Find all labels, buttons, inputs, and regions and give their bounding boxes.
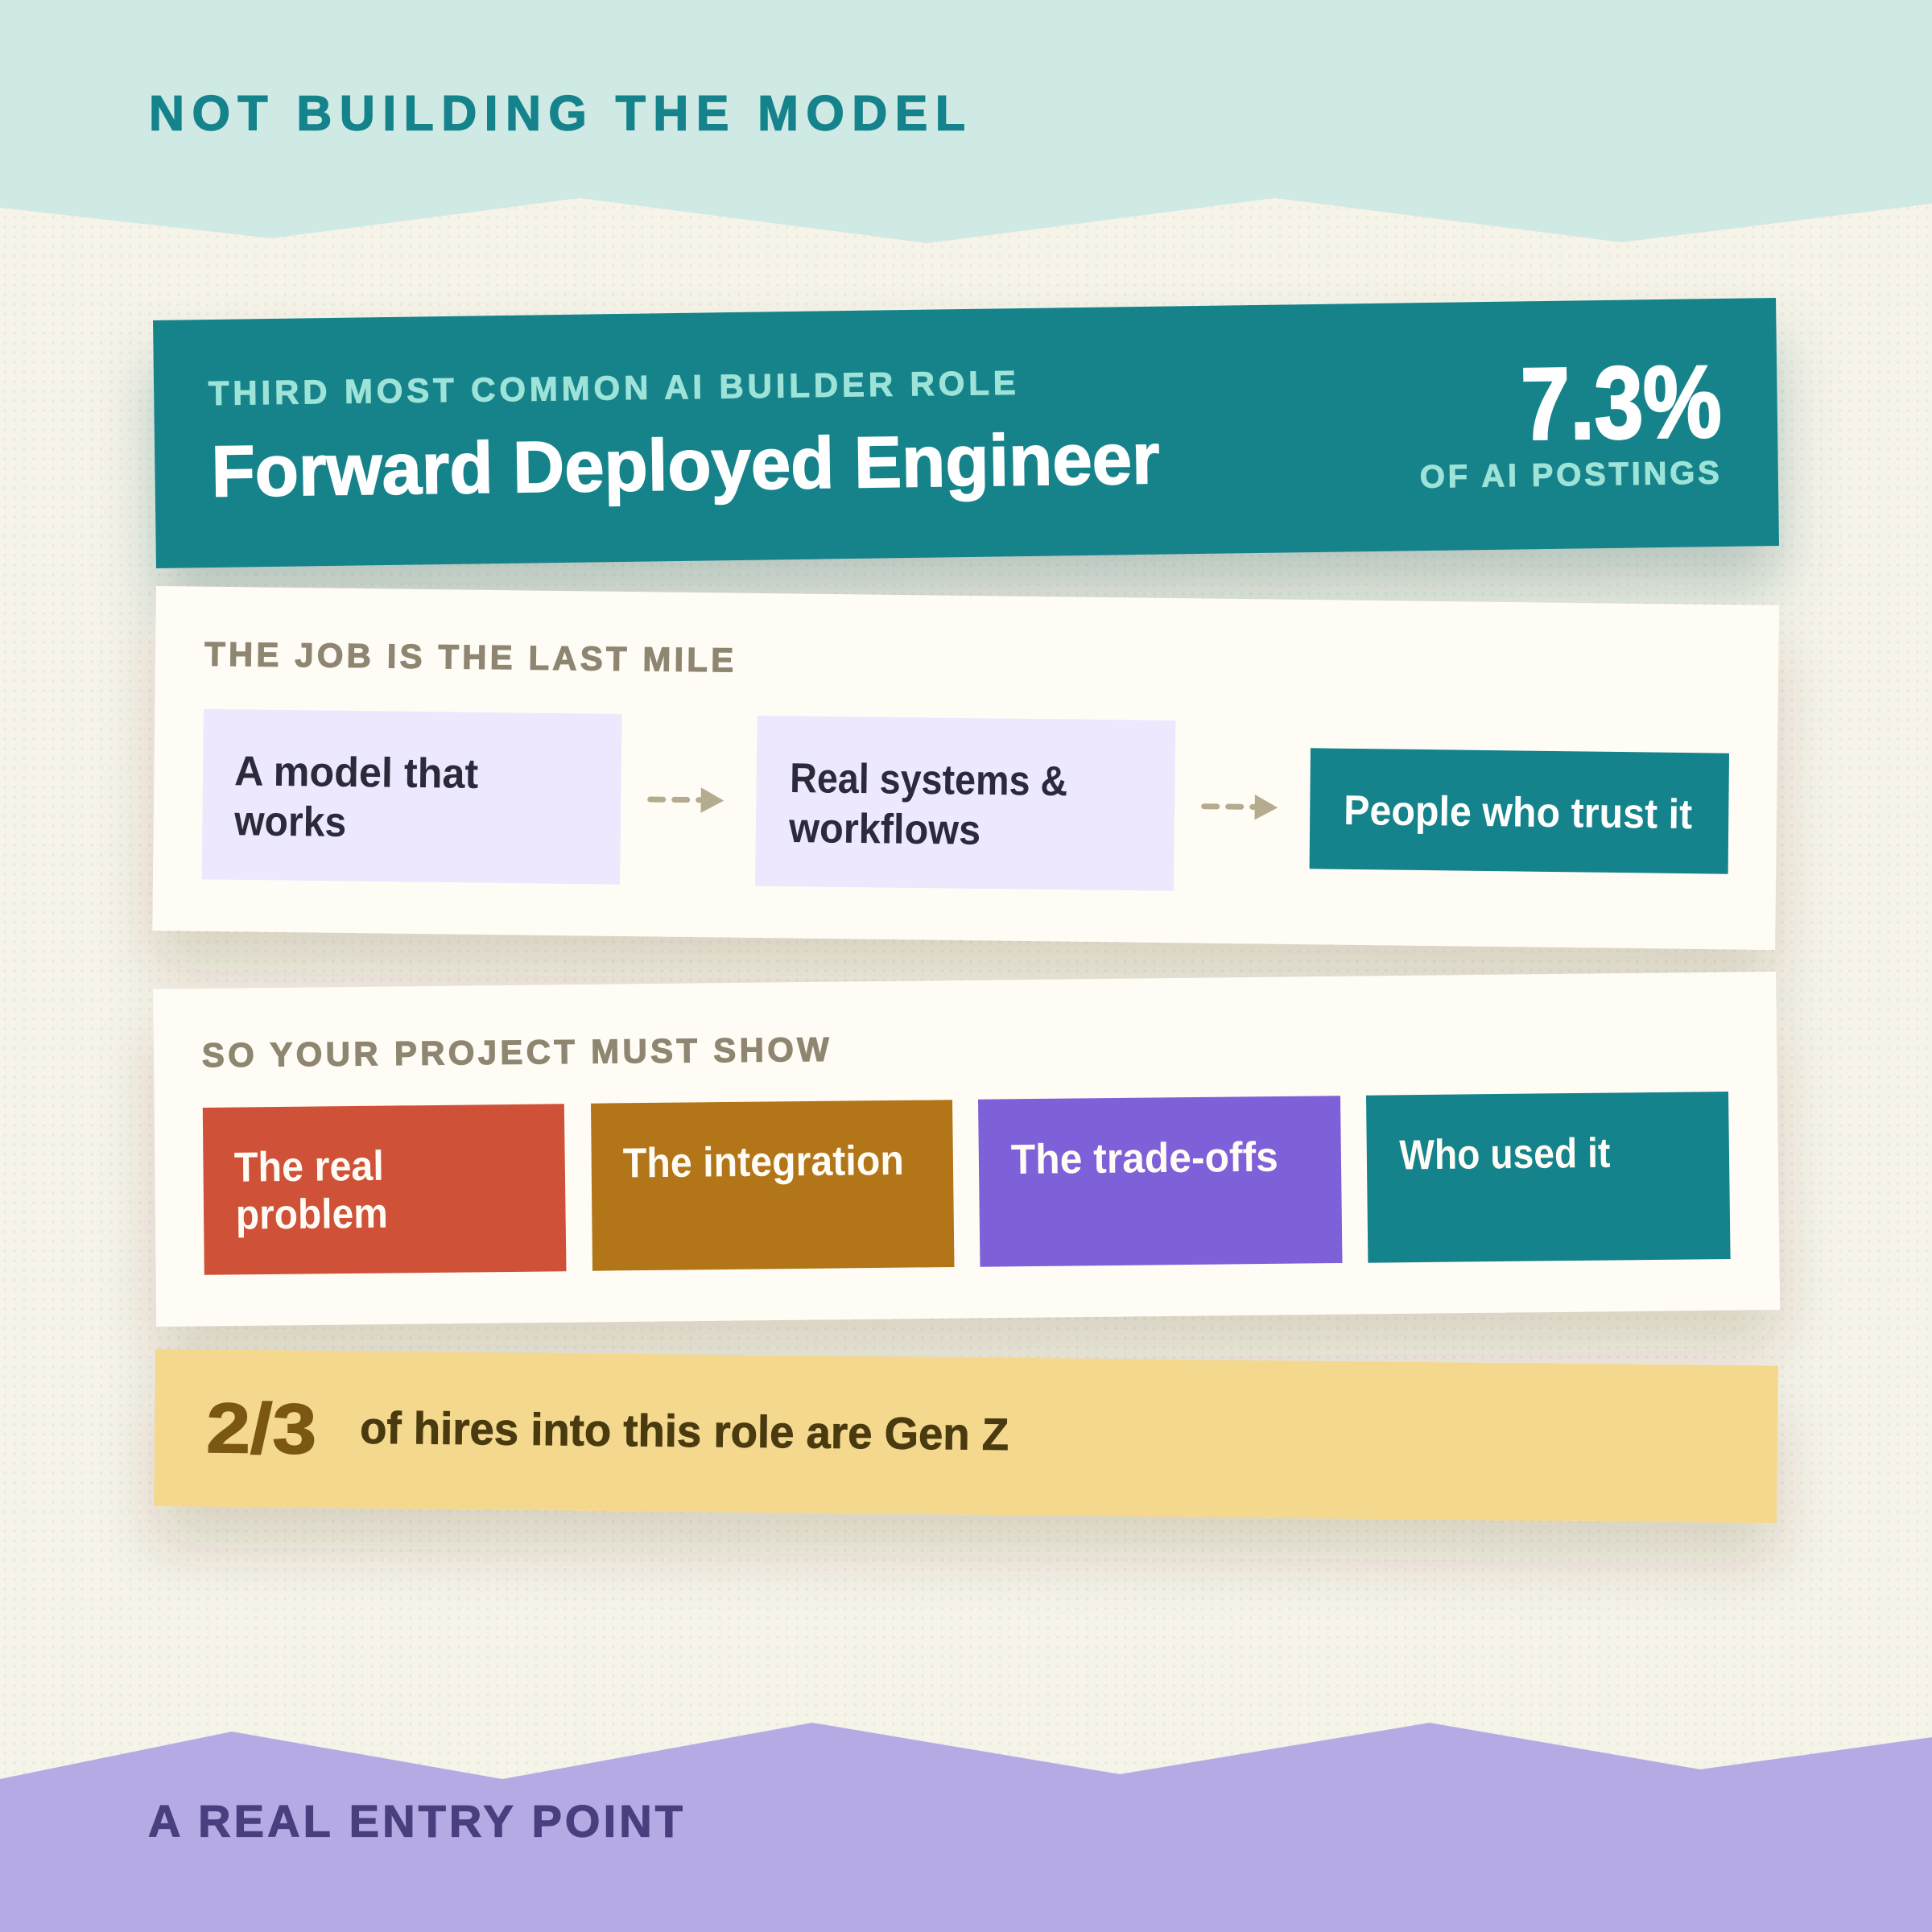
step: real systems and workflows: workflows <box>788 805 981 854</box>
step: people who trust it: People who trust it <box>1344 787 1693 838</box>
stat: 2/3: 2/3 <box>206 1388 317 1468</box>
panel: the job is the last mile <box>152 586 1779 950</box>
callout text: of hires into this role are Gen Z <box>360 1402 1009 1459</box>
card: the real problem: The real <box>234 1143 384 1191</box>
step: a model that works: works <box>233 798 347 846</box>
panel: role banner <box>153 298 1779 568</box>
arrow <box>650 787 724 813</box>
header band <box>0 0 1932 243</box>
panel: so your project must show <box>153 972 1780 1327</box>
step: a model that works <box>202 709 622 885</box>
card: the real problem: problem <box>236 1191 388 1239</box>
section heading: SO YOUR PROJECT MUST SHOW <box>202 1030 829 1074</box>
role name: Forward Deployed Engineer <box>211 419 1160 513</box>
card: who used it <box>1366 1092 1731 1263</box>
footer text: A REAL ENTRY POINT <box>148 1796 683 1847</box>
title: NOT BUILDING THE MODEL <box>149 86 965 141</box>
stat label: OF AI POSTINGS <box>1420 456 1719 495</box>
step: a model that works: A model that <box>234 748 479 798</box>
card: who used it: Who used it <box>1399 1130 1611 1179</box>
card: the trade-offs <box>978 1096 1343 1267</box>
step: people who trust it <box>1310 748 1729 874</box>
section heading: THE JOB IS THE LAST MILE <box>204 635 733 679</box>
callout: gen z hires <box>154 1349 1778 1523</box>
card: the trade-offs: The trade-offs <box>1011 1134 1278 1183</box>
stat: 7.3%: 7.3% <box>1520 344 1722 461</box>
step: real systems and workflows <box>755 716 1175 891</box>
eyebrow: THIRD MOST COMMON AI BUILDER ROLE <box>208 364 1016 412</box>
card: the integration: The integration <box>623 1137 904 1187</box>
arrow <box>1204 794 1278 820</box>
card: the integration <box>591 1100 955 1271</box>
footer band <box>0 1723 1932 1932</box>
card: the real problem <box>203 1104 567 1275</box>
step: real systems and workflows: Real systems & <box>790 755 1068 805</box>
